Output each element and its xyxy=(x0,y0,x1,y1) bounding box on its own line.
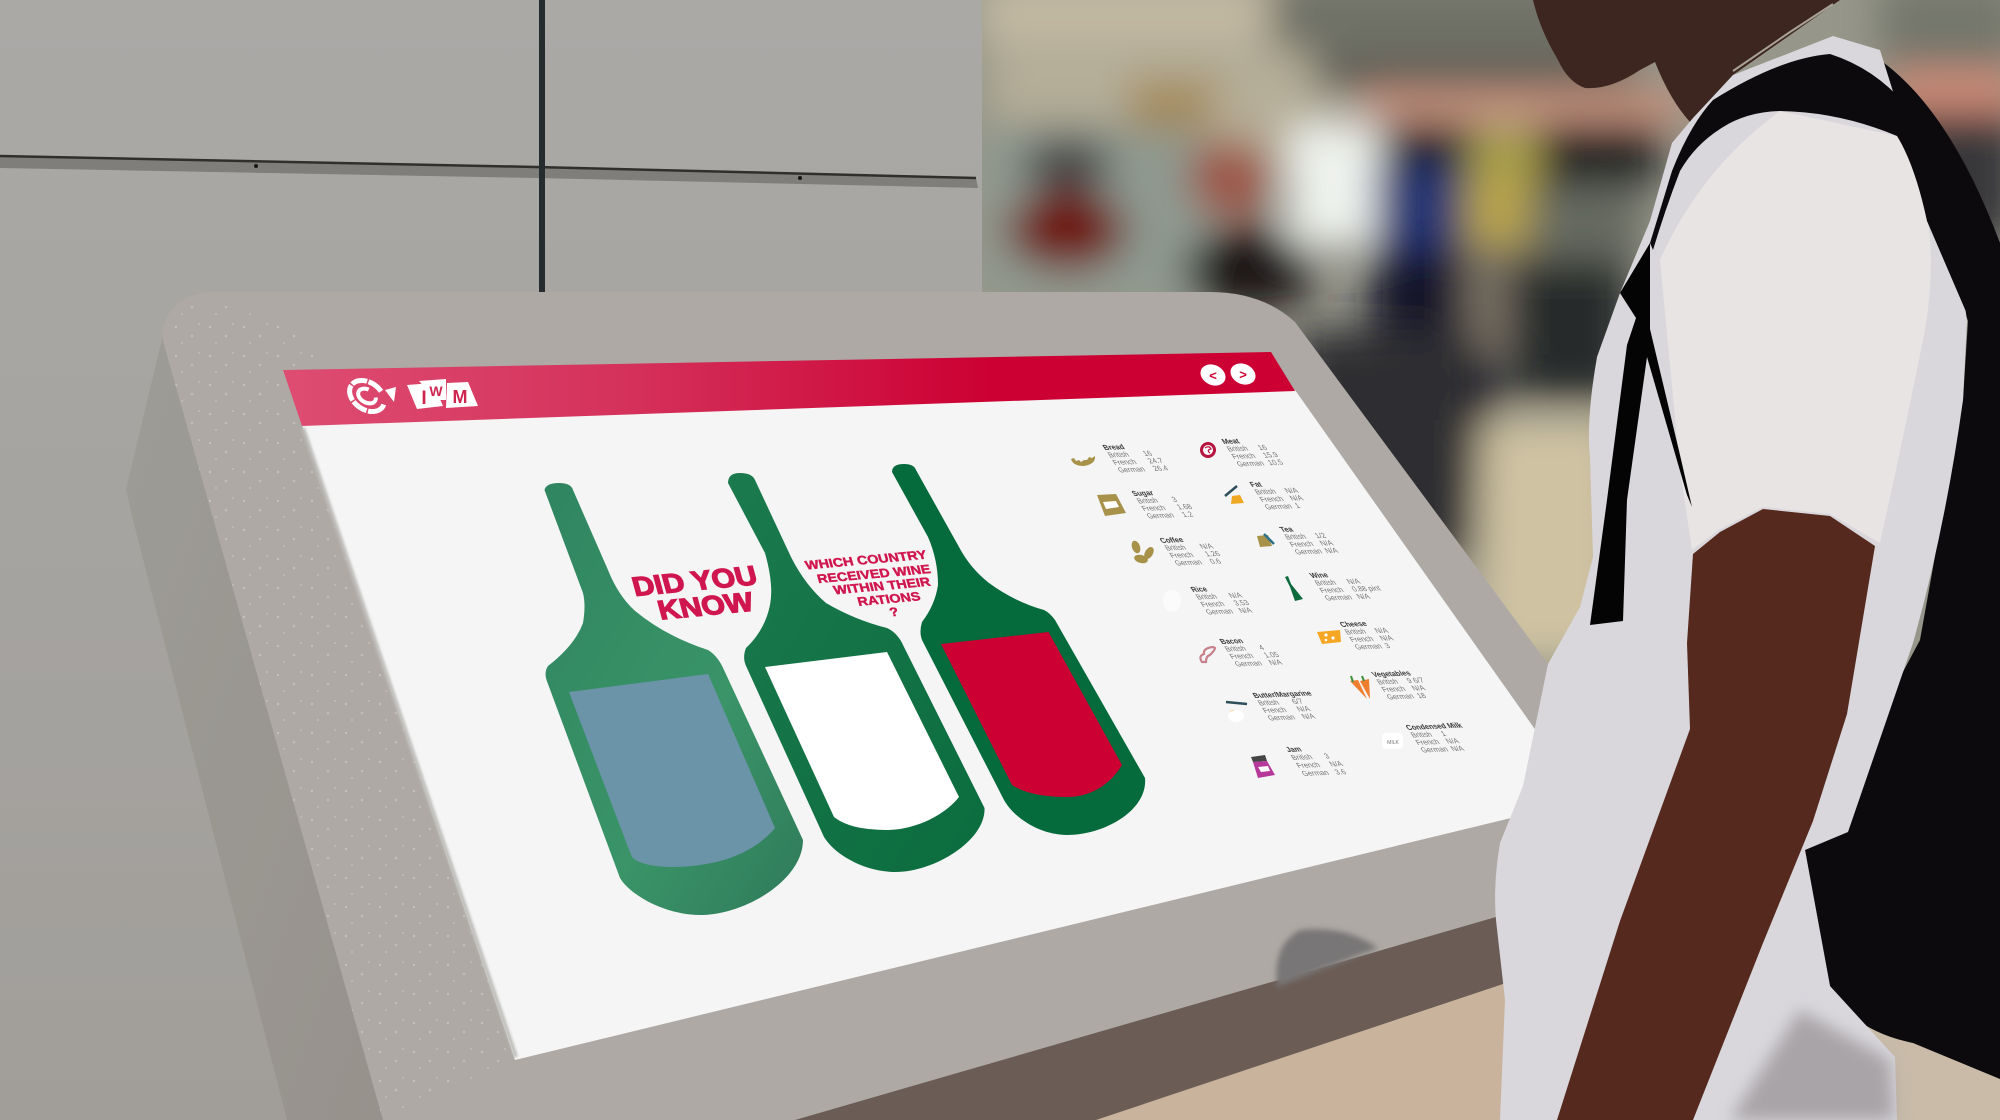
item: tea: British xyxy=(1283,532,1308,541)
item: butter / margarine: N/A xyxy=(1300,712,1318,721)
item: condensed milk: German xyxy=(1419,745,1450,754)
item: bacon: Bacon xyxy=(1218,637,1245,646)
item: bread: 26.4 xyxy=(1151,464,1171,473)
item: fat xyxy=(1225,479,1311,511)
item: rice xyxy=(1163,584,1257,616)
floor xyxy=(1050,960,1540,1120)
t-shirt xyxy=(1495,36,1967,1120)
kiosk side face xyxy=(126,335,400,1120)
question text: RATIONS xyxy=(856,589,922,609)
item: meat: 10.5 xyxy=(1266,458,1286,467)
question text: WITHIN THEIR xyxy=(832,575,932,597)
item: sugar: French xyxy=(1140,504,1167,513)
item: bread: 24.7 xyxy=(1146,456,1166,465)
logo: IWM: I xyxy=(421,388,427,409)
German fill xyxy=(941,632,1122,797)
question text: WHICH COUNTRY xyxy=(803,548,928,572)
item: wine: N/A xyxy=(1355,592,1373,601)
next button xyxy=(1227,359,1259,389)
right floor xyxy=(1840,960,2000,1120)
item: sugar xyxy=(1097,487,1200,520)
item: tea: French xyxy=(1288,540,1315,549)
item: tea: Tea xyxy=(1278,525,1296,534)
shirt lower shading xyxy=(1730,1010,1895,1120)
item: bread: British xyxy=(1106,450,1131,459)
British fill xyxy=(569,674,775,867)
item: jam: British xyxy=(1289,753,1314,762)
item: butter / margarine: Butter/Margarine xyxy=(1251,689,1314,700)
item: vegetables: French xyxy=(1380,685,1407,694)
item: bread: German xyxy=(1116,465,1147,474)
question text: RECEIVED WINE xyxy=(815,562,932,586)
item: condensed milk: MILK xyxy=(1387,740,1399,746)
item: jam xyxy=(1251,744,1351,778)
item: fat: Fat xyxy=(1248,480,1264,489)
item: condensed milk: N/A xyxy=(1449,744,1467,753)
item: coffee: N/A xyxy=(1198,542,1216,551)
header bar xyxy=(283,352,1295,426)
item: fat: 1 xyxy=(1293,502,1303,510)
item: bacon: British xyxy=(1223,644,1248,653)
item: vegetables: N/A xyxy=(1410,684,1428,692)
item: tea: 1/2 xyxy=(1313,531,1329,540)
item: fat: British xyxy=(1253,487,1278,496)
item: meat: German xyxy=(1235,459,1266,468)
item: jam: 3.6 xyxy=(1333,768,1349,776)
item: bread: French xyxy=(1111,458,1138,467)
item: meat: 15.9 xyxy=(1261,451,1281,459)
item: coffee: 1.26 xyxy=(1203,549,1223,558)
reflection shadow on bezel xyxy=(1276,929,1378,987)
item: sugar: German xyxy=(1145,511,1176,520)
item: cheese: Cheese xyxy=(1338,619,1369,629)
item: meat: 16 xyxy=(1256,443,1270,452)
item: vegetables: German xyxy=(1385,692,1416,701)
item: coffee: French xyxy=(1168,551,1195,560)
item: meat: British xyxy=(1225,444,1250,453)
item: rice: Rice xyxy=(1189,585,1210,594)
item: tea: N/A xyxy=(1323,546,1341,555)
item: butter / margarine xyxy=(1226,689,1329,722)
item: butter / margarine: N/A xyxy=(1295,705,1313,713)
item: meat: Meat xyxy=(1220,437,1242,446)
item: cheese: N/A xyxy=(1373,626,1391,635)
item: wine: British xyxy=(1313,578,1338,587)
item: bread: Bread xyxy=(1101,443,1127,452)
heading: did you know: KNOW xyxy=(655,587,758,626)
item: condensed milk: Condensed Milk xyxy=(1404,721,1465,732)
item: sugar: British xyxy=(1135,496,1160,505)
item: condensed milk: N/A xyxy=(1444,737,1462,745)
backpack xyxy=(1805,60,2000,1079)
heading: did you know: DID YOU xyxy=(629,561,761,602)
item: tea xyxy=(1257,524,1341,556)
item: cheese: British xyxy=(1343,627,1368,636)
item: rice: French xyxy=(1199,600,1226,609)
item: wine: German xyxy=(1323,593,1354,602)
item: vegetables: British xyxy=(1375,677,1400,686)
item: fat: French xyxy=(1258,495,1285,504)
item: jam: French xyxy=(1294,761,1322,770)
item: cheese: French xyxy=(1348,635,1375,644)
item: bacon: German xyxy=(1233,659,1264,668)
item: vegetables: 9 6/7 xyxy=(1405,676,1427,685)
sleeve xyxy=(1660,111,1931,550)
background: blurred shopping hall xyxy=(960,0,2000,1120)
item: coffee: Coffee xyxy=(1158,536,1186,545)
item: coffee xyxy=(1130,534,1228,567)
front strap xyxy=(1590,243,1692,625)
item: meat xyxy=(1200,436,1286,468)
item: bacon: 1.05 xyxy=(1262,650,1282,659)
item: rice: N/A xyxy=(1227,591,1245,600)
bottle: German xyxy=(892,464,1145,835)
kiosk bezel xyxy=(163,292,1580,1120)
item: sugar: Sugar xyxy=(1130,489,1156,498)
item: coffee: British xyxy=(1163,543,1188,552)
item: jam: German xyxy=(1300,768,1331,778)
item: bacon: N/A xyxy=(1267,658,1285,667)
question text xyxy=(803,548,932,619)
ration list xyxy=(1071,436,1480,778)
kiosk body xyxy=(126,292,1580,1120)
item: bacon: 4 xyxy=(1257,643,1267,652)
item: coffee: 0.6 xyxy=(1208,557,1224,566)
item: butter / margarine: German xyxy=(1266,713,1297,722)
next button: > xyxy=(1239,367,1247,382)
bezel speckle xyxy=(163,296,520,1120)
item: vegetables: 18 xyxy=(1415,691,1429,700)
backpack strap over shoulder xyxy=(1650,54,2000,320)
item: fat: N/A xyxy=(1283,486,1301,495)
item: condensed milk: French xyxy=(1414,738,1441,747)
item: wine: Wine xyxy=(1308,571,1331,580)
item: fat: German xyxy=(1263,502,1294,511)
item: fat: N/A xyxy=(1288,494,1306,502)
item: tea: German xyxy=(1293,547,1324,556)
item: butter / margarine: 6/7 xyxy=(1290,697,1306,706)
screen xyxy=(283,352,1585,1060)
item: bacon: French xyxy=(1228,652,1255,661)
item: coffee: German xyxy=(1173,558,1204,567)
item: butter / margarine: French xyxy=(1261,706,1288,715)
wall panels xyxy=(0,0,982,1120)
item: jam: N/A xyxy=(1327,760,1345,768)
item: wine: French xyxy=(1318,586,1345,595)
logo: IWM: M xyxy=(452,387,468,407)
head and neck xyxy=(1533,0,1840,122)
item: sugar: 1.68 xyxy=(1175,502,1195,511)
item: bread: 16 xyxy=(1141,449,1155,458)
item: bread xyxy=(1071,441,1171,474)
item: sugar: 3 xyxy=(1170,495,1180,504)
necklace xyxy=(1733,4,1833,71)
item: wine: N/A xyxy=(1345,577,1363,586)
heading: did you know xyxy=(629,561,761,626)
item: cheese: N/A xyxy=(1378,634,1396,642)
item: condensed milk: 1 xyxy=(1439,730,1449,738)
arm xyxy=(1557,509,1875,1120)
logo: IWM: W xyxy=(429,383,443,399)
item: rice: 3.53 xyxy=(1232,599,1252,607)
item: wine: 0.88 pint xyxy=(1350,584,1383,593)
item: jam: 3 xyxy=(1322,752,1332,760)
logo: IWM xyxy=(407,379,478,409)
previous button xyxy=(1197,360,1229,390)
item: meat: French xyxy=(1230,452,1257,461)
item: sugar: 1.2 xyxy=(1180,510,1196,519)
French fill xyxy=(765,652,959,830)
item: rice: British xyxy=(1194,592,1219,601)
item: butter / margarine: British xyxy=(1256,698,1281,707)
logo: centenary circle xyxy=(344,374,396,418)
bottle: British xyxy=(544,483,803,915)
item: cheese xyxy=(1317,619,1401,651)
item: rice: German xyxy=(1204,607,1235,616)
item: cheese: German xyxy=(1353,642,1384,651)
item: cheese: 3 xyxy=(1383,642,1393,650)
screen background xyxy=(302,390,1585,1060)
item: bacon xyxy=(1200,635,1287,668)
item: wine xyxy=(1285,569,1388,602)
person with backpack xyxy=(1495,0,2000,1120)
item: jam: Jam xyxy=(1284,745,1304,754)
bottle: French xyxy=(728,473,985,872)
item: tea: N/A xyxy=(1318,539,1336,547)
item: vegetables: Vegetables xyxy=(1370,669,1413,679)
kiosk base trim xyxy=(790,915,1515,1120)
item: condensed milk: British xyxy=(1409,730,1434,739)
previous button: < xyxy=(1209,368,1217,383)
item: condensed milk xyxy=(1382,721,1480,754)
question text: ? xyxy=(888,605,900,619)
item: vegetables xyxy=(1350,669,1437,701)
item: rice: N/A xyxy=(1237,606,1255,615)
